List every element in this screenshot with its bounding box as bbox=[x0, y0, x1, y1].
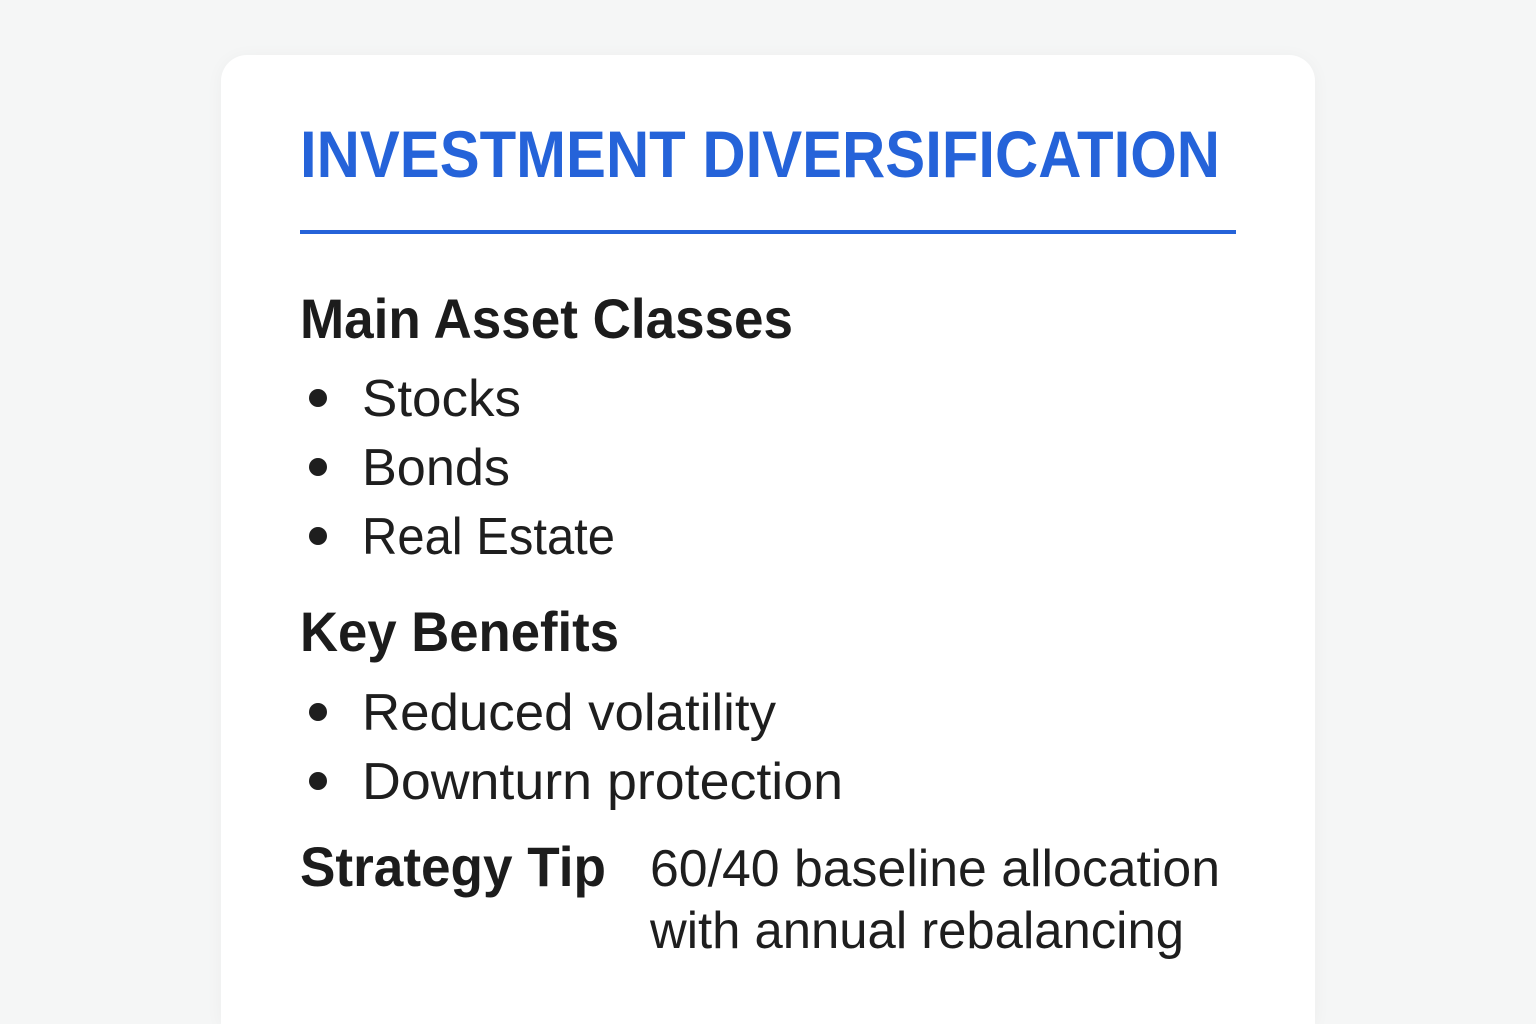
text: strategy tip body bbox=[649, 840, 1220, 960]
list: asset classes: Real Estate bbox=[362, 508, 615, 566]
list: asset classes bbox=[309, 370, 615, 566]
heading: main asset classes: Main Asset Classes bbox=[300, 287, 793, 350]
panel: card bbox=[221, 55, 1315, 1024]
heading: key benefits: Key Benefits bbox=[300, 600, 619, 663]
text: strategy tip body: with annual rebalancing bbox=[649, 902, 1184, 960]
text: strategy tip body: 60/40 baseline allocation bbox=[650, 840, 1220, 898]
list: benefits: Downturn protection bbox=[362, 753, 843, 811]
list: asset classes: Stocks bbox=[362, 370, 521, 428]
title underline bbox=[300, 230, 1236, 234]
title: INVESTMENT DIVERSIFICATION bbox=[300, 117, 1220, 191]
list: benefits: Reduced volatility bbox=[362, 684, 776, 742]
list: asset classes: Bonds bbox=[362, 439, 510, 497]
heading: strategy tip: Strategy Tip bbox=[300, 835, 606, 898]
list: benefits bbox=[309, 684, 843, 811]
